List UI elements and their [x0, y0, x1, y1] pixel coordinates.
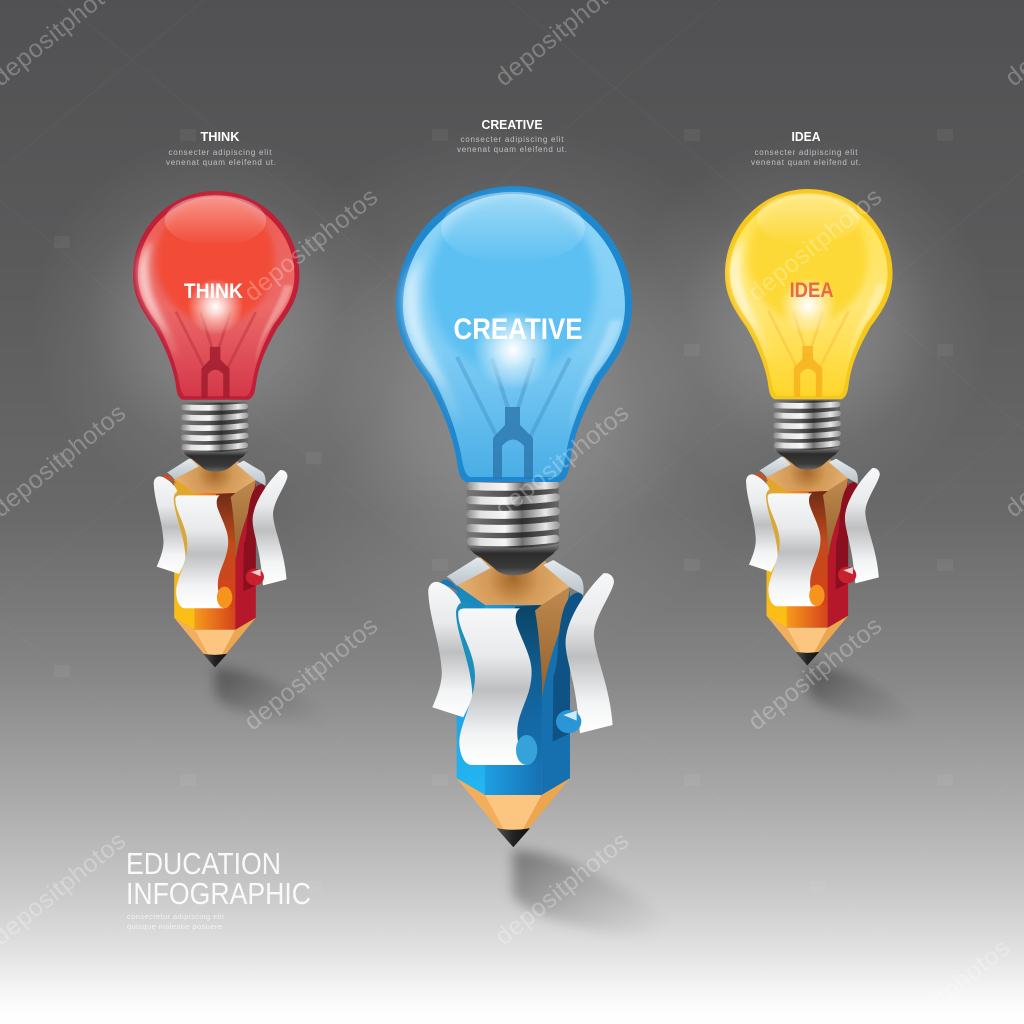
- description: idea: consecter adipiscing elit: [754, 148, 858, 157]
- description: creative: [457, 135, 567, 154]
- stock watermark camera icons: [54, 129, 953, 1000]
- description: idea: venenat quam eleifend ut.: [751, 158, 861, 167]
- title description: quisque molestie posuere: [127, 922, 222, 931]
- bulb label: think: THINK: [184, 280, 244, 303]
- pencil: red and orange: [154, 403, 287, 667]
- title description: consectetur adipiscing elit: [127, 912, 225, 921]
- description: idea: [751, 148, 861, 167]
- ground shadows under pencils: [215, 666, 935, 945]
- bulb label: idea: IDEA: [790, 278, 834, 302]
- heading: idea: IDEA: [792, 130, 820, 144]
- pencil: yellow and red: [746, 401, 880, 665]
- scroll curls: [217, 569, 264, 608]
- depositphotos watermarks: depositphotos: [490, 827, 634, 951]
- bulb: red: [133, 191, 299, 400]
- description: creative: consecter adipiscing elit: [460, 135, 564, 144]
- title: [126, 846, 311, 911]
- description: think: consecter adipiscing elit: [168, 148, 272, 157]
- bulb label: creative: CREATIVE: [454, 313, 582, 346]
- bulb glow halos: [31, 120, 993, 660]
- scroll curls: [516, 710, 581, 765]
- description: think: [166, 148, 276, 167]
- title: EDUCATION: [126, 846, 281, 881]
- description: creative: venenat quam eleifend ut.: [457, 145, 567, 154]
- pencil: blue: [428, 479, 614, 847]
- heading: creative: CREATIVE: [482, 118, 542, 132]
- bulb: yellow: [725, 189, 893, 399]
- description: think: venenat quam eleifend ut.: [166, 158, 276, 167]
- scroll curls: [809, 567, 856, 606]
- title block: [126, 846, 311, 931]
- depositphotos watermarks: depositphotos: [490, 399, 634, 523]
- title description: [127, 912, 225, 931]
- heading: think: THINK: [200, 130, 240, 144]
- depositphotos watermarks: depositphotos: [239, 612, 383, 736]
- depositphotos watermarks: depositphotos: [743, 612, 887, 736]
- depositphotos watermarks: depositphotos: [239, 183, 383, 307]
- bulb: blue: [396, 186, 632, 482]
- title: INFOGRAPHIC: [126, 876, 311, 911]
- column: idea: [725, 130, 893, 665]
- column: think: [133, 130, 299, 667]
- depositphotos watermarks: depositphotos: [743, 183, 887, 307]
- column: creative: [396, 118, 632, 847]
